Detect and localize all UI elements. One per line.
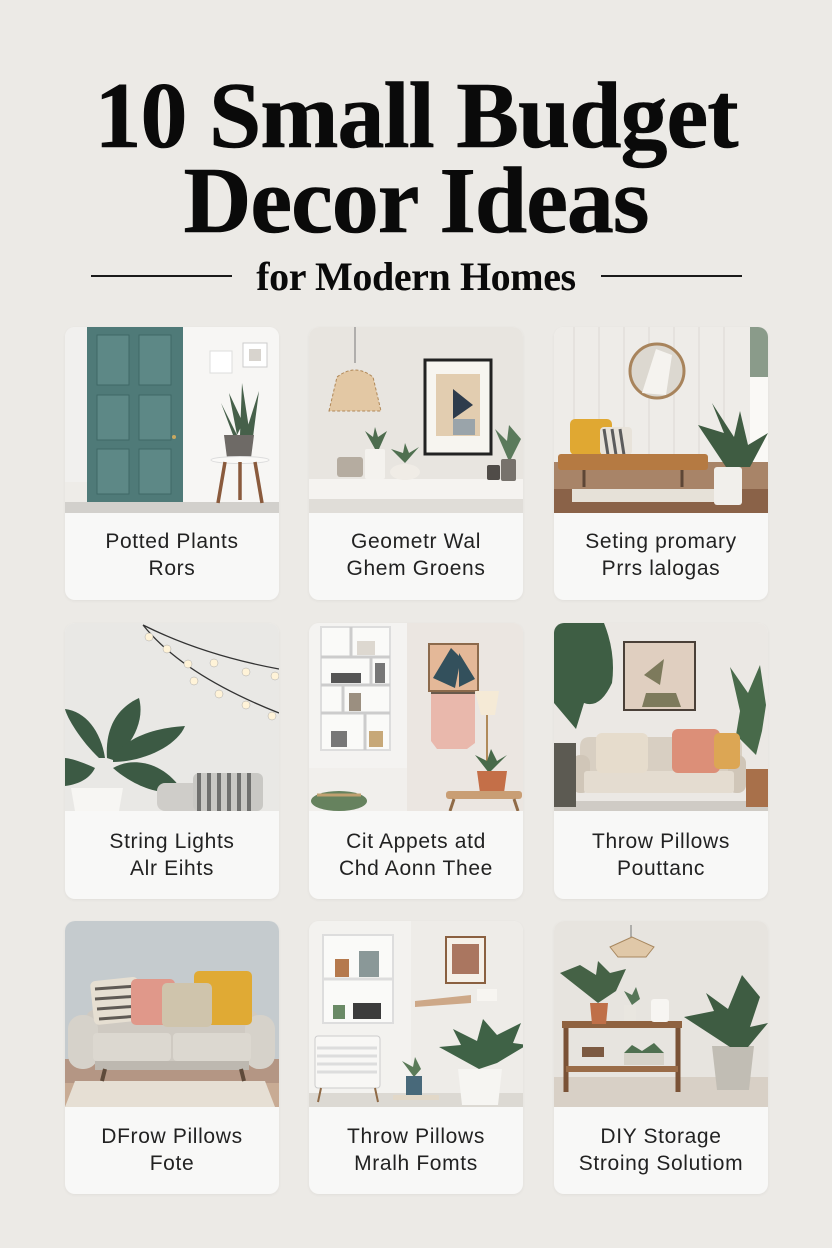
- caption: [105, 530, 239, 580]
- caption: Rors: [149, 557, 195, 580]
- caption: Ghem Groens: [346, 557, 486, 580]
- panel: potted plants: [65, 327, 279, 600]
- caption: [101, 1125, 243, 1175]
- caption: Throw Pillows: [347, 1125, 485, 1148]
- caption: Chd Aonn Thee: [339, 857, 493, 880]
- panel: dfrow pillows: [65, 921, 279, 1194]
- caption: [585, 530, 737, 580]
- caption: Cit Appets atd: [346, 830, 486, 853]
- caption: Prrs lalogas: [602, 557, 720, 580]
- title: 10 Small Budget: [94, 64, 738, 168]
- caption: Seting promary: [585, 530, 737, 553]
- panel: diy storage: [554, 921, 768, 1194]
- image: wall art shelf: [309, 327, 523, 513]
- image: shelves, art and towel: [309, 623, 523, 811]
- image: teal door and plant: [65, 327, 279, 513]
- panel: throw pillows 2: [309, 921, 523, 1194]
- subtitle: for Modern Homes: [256, 254, 576, 299]
- panel: seating: [554, 327, 768, 600]
- image: sofa with pillows: [554, 623, 768, 811]
- caption: DFrow Pillows: [101, 1125, 243, 1148]
- caption: Pouttanc: [617, 857, 705, 880]
- image: lights and leafy plant: [65, 623, 279, 811]
- panel: geometric wall: [309, 327, 523, 600]
- image: bench and mirror: [554, 327, 768, 513]
- caption: Geometr Wal: [351, 530, 481, 553]
- panel: cit appets: [309, 623, 523, 899]
- caption: [347, 1125, 485, 1175]
- title: [94, 64, 738, 253]
- caption: [579, 1125, 743, 1175]
- panel: string lights: [65, 623, 279, 899]
- caption: Stroing Solutiom: [579, 1152, 743, 1175]
- caption: Mralh Fomts: [354, 1152, 478, 1175]
- caption: String Lights: [109, 830, 235, 853]
- caption: Fote: [150, 1152, 194, 1175]
- image: console table with plants: [554, 921, 768, 1107]
- image: shelves, radiator and plant: [309, 921, 523, 1107]
- caption: Alr Eihts: [130, 857, 214, 880]
- caption: [339, 830, 493, 880]
- image: grey sofa: [65, 921, 279, 1107]
- caption: [592, 830, 730, 880]
- caption: DIY Storage: [600, 1125, 722, 1148]
- caption: Potted Plants: [105, 530, 239, 553]
- caption: [109, 830, 235, 880]
- caption: Throw Pillows: [592, 830, 730, 853]
- panel: throw pillows: [554, 623, 768, 899]
- title: Decor Ideas: [183, 149, 648, 253]
- caption: [346, 530, 486, 580]
